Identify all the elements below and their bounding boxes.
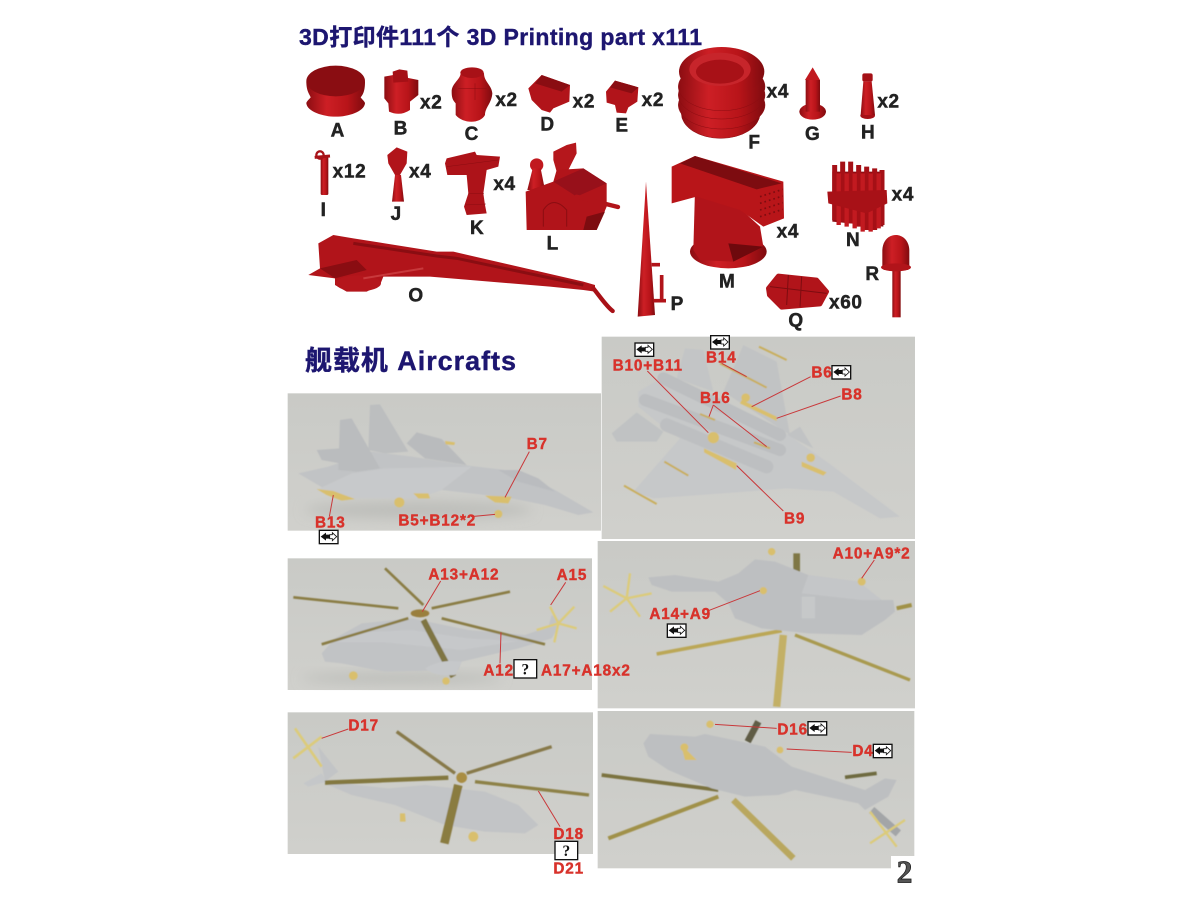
part F: x4	[767, 82, 789, 103]
panel: printed parts left half	[306, 66, 618, 311]
photo panel: helicopter lower right	[598, 711, 920, 890]
part E: E	[615, 116, 629, 137]
callouts: jet underside: B9	[784, 511, 805, 528]
part O: crane	[308, 235, 613, 311]
part G: G	[805, 124, 820, 145]
callouts: jet underside: B10+B11	[613, 357, 683, 374]
jet model underside	[612, 345, 900, 518]
photo panel: helicopter rotors side view	[288, 558, 631, 690]
page number	[891, 855, 920, 890]
callouts: helicopter lower right	[715, 721, 892, 760]
callouts: jet underside: B6	[811, 364, 833, 381]
part I	[315, 151, 366, 221]
callouts: jet side: B7	[527, 436, 548, 453]
part D: D	[540, 115, 555, 136]
part I: x12	[333, 161, 366, 182]
helicopter model lower left	[293, 728, 589, 843]
panel: printed parts right half	[606, 47, 914, 332]
part D	[528, 75, 595, 136]
part C: C	[465, 124, 479, 145]
part L: L	[547, 233, 559, 254]
callouts: helicopter lower left: D21	[553, 861, 584, 878]
photo panel: jet side view	[288, 393, 601, 544]
part N: x4	[892, 185, 914, 206]
part R: R	[865, 264, 880, 285]
callouts: helicopter right: A10+A9*2	[833, 545, 910, 562]
part J: x4	[409, 161, 431, 182]
part H	[860, 73, 900, 143]
callouts: helicopter side: A15	[557, 567, 587, 584]
part D: x2	[573, 91, 595, 112]
part B: B	[394, 118, 408, 139]
part F	[678, 47, 789, 153]
part O: crane: O	[408, 286, 424, 307]
part P	[638, 182, 684, 317]
helicopter model side	[293, 568, 577, 685]
part A	[306, 66, 365, 142]
part I: I	[321, 200, 327, 221]
page number: 2	[897, 855, 912, 890]
heading: aircrafts: 舰载机 Aircrafts	[305, 346, 516, 376]
helicopter model lower	[602, 721, 905, 858]
part Q	[768, 275, 863, 332]
callouts: helicopter side	[422, 566, 631, 679]
callouts: jet side: B13	[315, 515, 346, 532]
part N	[827, 162, 914, 251]
photo panel: helicopter underside right	[598, 541, 915, 708]
part C	[452, 67, 518, 145]
part G	[799, 67, 826, 145]
part J: J	[391, 204, 402, 225]
helicopter model	[603, 548, 912, 707]
callouts: helicopter right	[649, 545, 910, 637]
callouts: helicopter side: A13+A12	[428, 566, 499, 583]
part K: K	[470, 218, 484, 239]
part J	[387, 147, 431, 225]
part F: F	[748, 132, 761, 153]
part K: x4	[493, 174, 516, 195]
callouts: helicopter lower left: ?	[562, 843, 570, 860]
callouts: jet underside: B16	[700, 390, 731, 407]
callouts: helicopter right: A14+A9	[649, 606, 711, 623]
part L	[526, 143, 618, 254]
part A: A	[331, 121, 345, 142]
title: 3D printing parts: 3D打印件111个 3D Printing part x111	[299, 24, 702, 50]
photo panel: helicopter lower left	[288, 712, 593, 878]
callouts: helicopter side: A17+A18x2	[541, 662, 631, 679]
callouts: helicopter lower left: D17	[348, 718, 379, 735]
callouts: helicopter lower right: D16	[777, 721, 808, 738]
part B: x2	[420, 92, 442, 113]
part M: M	[719, 271, 735, 292]
callouts: helicopter lower right: D4	[852, 743, 874, 760]
part C: x2	[495, 90, 518, 111]
jet model	[298, 404, 593, 518]
part M	[672, 156, 799, 292]
callouts: helicopter lower left: D18	[553, 826, 584, 843]
part E: x2	[642, 90, 664, 111]
callouts: jet side	[315, 436, 548, 544]
part Q: Q	[788, 311, 804, 332]
part Q: x60	[829, 292, 863, 313]
callouts: jet side: B5+B12*2	[398, 513, 476, 530]
callouts: jet underside: B8	[841, 386, 863, 403]
part N: N	[846, 230, 860, 251]
part E	[606, 81, 664, 137]
callouts: helicopter side: ?	[521, 661, 529, 678]
part K	[445, 152, 516, 239]
callouts: helicopter lower left	[322, 718, 584, 878]
part H: x2	[877, 91, 900, 112]
part H: H	[861, 122, 875, 143]
part M: x4	[777, 221, 799, 242]
photo panel: jet underside view	[602, 336, 915, 539]
callouts: jet underside: B14	[706, 349, 737, 366]
part P: P	[671, 294, 684, 315]
callouts: jet underside	[613, 336, 863, 528]
callouts: helicopter side: A12	[483, 662, 514, 679]
part B	[384, 69, 442, 139]
part R	[865, 235, 911, 317]
